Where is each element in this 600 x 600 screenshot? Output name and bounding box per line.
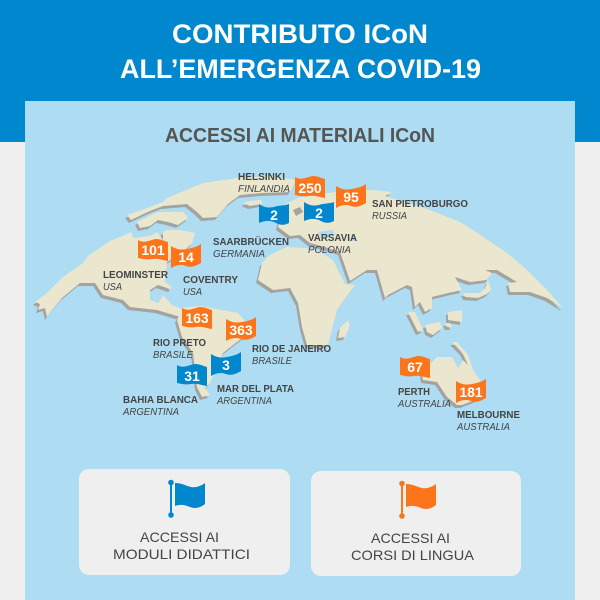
label: Melbourne: AUSTRALIA [456, 422, 510, 433]
label: Bahia Blanca: BAHIA BLANCA [123, 395, 198, 406]
label: Perth [397, 387, 451, 410]
flag: Rio Preto 163: 163 [185, 310, 209, 326]
label: San Pietroburgo: RUSSIA [372, 211, 407, 222]
label: Helsinki: HELSINKI [238, 172, 285, 183]
label: Varsavia [308, 233, 357, 256]
icon: orange flag [399, 481, 436, 519]
legend text: corsi di lingua: CORSI DI LINGUA [351, 547, 475, 563]
label: Perth: AUSTRALIA [397, 399, 451, 410]
label: Rio Preto: BRASILE [153, 350, 193, 361]
heading: accessi ai materiali: ACCESSI AI MATERIALI ICoN [165, 125, 435, 147]
label: San Pietroburgo [372, 199, 468, 222]
flag: San Pietroburgo 95 [336, 184, 366, 208]
legend text: moduli didattici: MODULI DIDATTICI [113, 546, 250, 562]
flag: San Pietroburgo 95: 95 [343, 189, 359, 205]
flag: Coventry 14: 14 [178, 249, 194, 265]
icon: blue flag [168, 480, 205, 518]
flag: Saarbrücken 2 [259, 204, 289, 225]
flag: Helsinki 250 [295, 176, 325, 198]
flag: Rio de Janeiro 363 [226, 317, 256, 341]
legend card: moduli didattici [79, 469, 290, 575]
flag: Leominster 101: 101 [141, 242, 165, 258]
label: Rio Preto: RIO PRETO [153, 338, 206, 349]
legend text: corsi di lingua [351, 530, 475, 563]
label: Perth: PERTH [398, 387, 430, 398]
label: Rio de Janeiro: BRASILE [252, 356, 292, 367]
label: Rio de Janeiro: RIO DE JANEIRO [252, 344, 331, 355]
legend text: moduli didattici: ACCESSI AI [140, 529, 219, 545]
flag: Coventry 14 [171, 244, 201, 268]
flag: Saarbrücken 2: 2 [270, 207, 278, 223]
flag: Leominster 101 [138, 239, 168, 261]
label: Rio Preto [153, 338, 206, 361]
label: Saarbrücken [213, 235, 289, 260]
legend text: corsi di lingua: ACCESSI AI [371, 530, 450, 546]
flag: Mar del Plata 3: 3 [222, 357, 230, 373]
flag: Helsinki 250: 250 [298, 180, 322, 196]
label: Helsinki: FINLANDIA [238, 184, 290, 195]
world map [33, 176, 563, 408]
flag: Bahia Blanca 31: 31 [184, 368, 200, 384]
title: CONTRIBUTO ICoN [172, 19, 428, 49]
title [120, 19, 481, 84]
map flags [138, 176, 486, 403]
title: ALL’EMERGENZA COVID-19 [120, 54, 481, 84]
flag: Perth 67: 67 [407, 359, 423, 375]
flag: Varsavia 2: 2 [315, 205, 323, 221]
label: Bahia Blanca: ARGENTINA [122, 407, 179, 418]
header band [0, 0, 600, 142]
flag: Rio de Janeiro 363: 363 [229, 322, 253, 338]
label: Melbourne: MELBOURNE [457, 410, 520, 421]
location labels [103, 172, 520, 433]
label: Leominster: LEOMINSTER [103, 270, 169, 281]
flag: Melbourne 181 [456, 379, 486, 403]
panel: map background [25, 101, 575, 600]
label: Varsavia: VARSAVIA [308, 233, 357, 244]
label: Leominster: USA [103, 282, 122, 293]
label: Coventry [183, 275, 238, 298]
label: Mar del Plata: MAR DEL PLATA [217, 384, 294, 395]
label: Melbourne [456, 410, 520, 433]
label: Rio de Janeiro [252, 344, 331, 367]
flag: Bahia Blanca 31 [177, 364, 207, 386]
label: Mar del Plata [216, 384, 294, 407]
label: San Pietroburgo: SAN PIETROBURGO [372, 199, 468, 210]
label: Mar del Plata: ARGENTINA [216, 396, 272, 407]
label: Bahia Blanca [122, 395, 198, 418]
flag: Rio Preto 163 [182, 307, 212, 329]
label: Saarbrücken: GERMANIA [213, 249, 265, 260]
flag: Varsavia 2 [304, 202, 334, 223]
flag: Perth 67 [400, 356, 430, 378]
legend card: corsi di lingua [311, 471, 521, 576]
label: Leominster [103, 270, 169, 293]
label: Saarbrücken: SAARBRÜCKEN [213, 235, 289, 248]
label: Varsavia: POLONIA [308, 245, 351, 256]
flag: Melbourne 181: 181 [459, 384, 483, 400]
label: Helsinki [238, 172, 290, 195]
label: Coventry: COVENTRY [183, 275, 238, 286]
label: Coventry: USA [183, 287, 202, 298]
flag: Mar del Plata 3 [211, 352, 241, 376]
legend text: moduli didattici [113, 529, 250, 562]
